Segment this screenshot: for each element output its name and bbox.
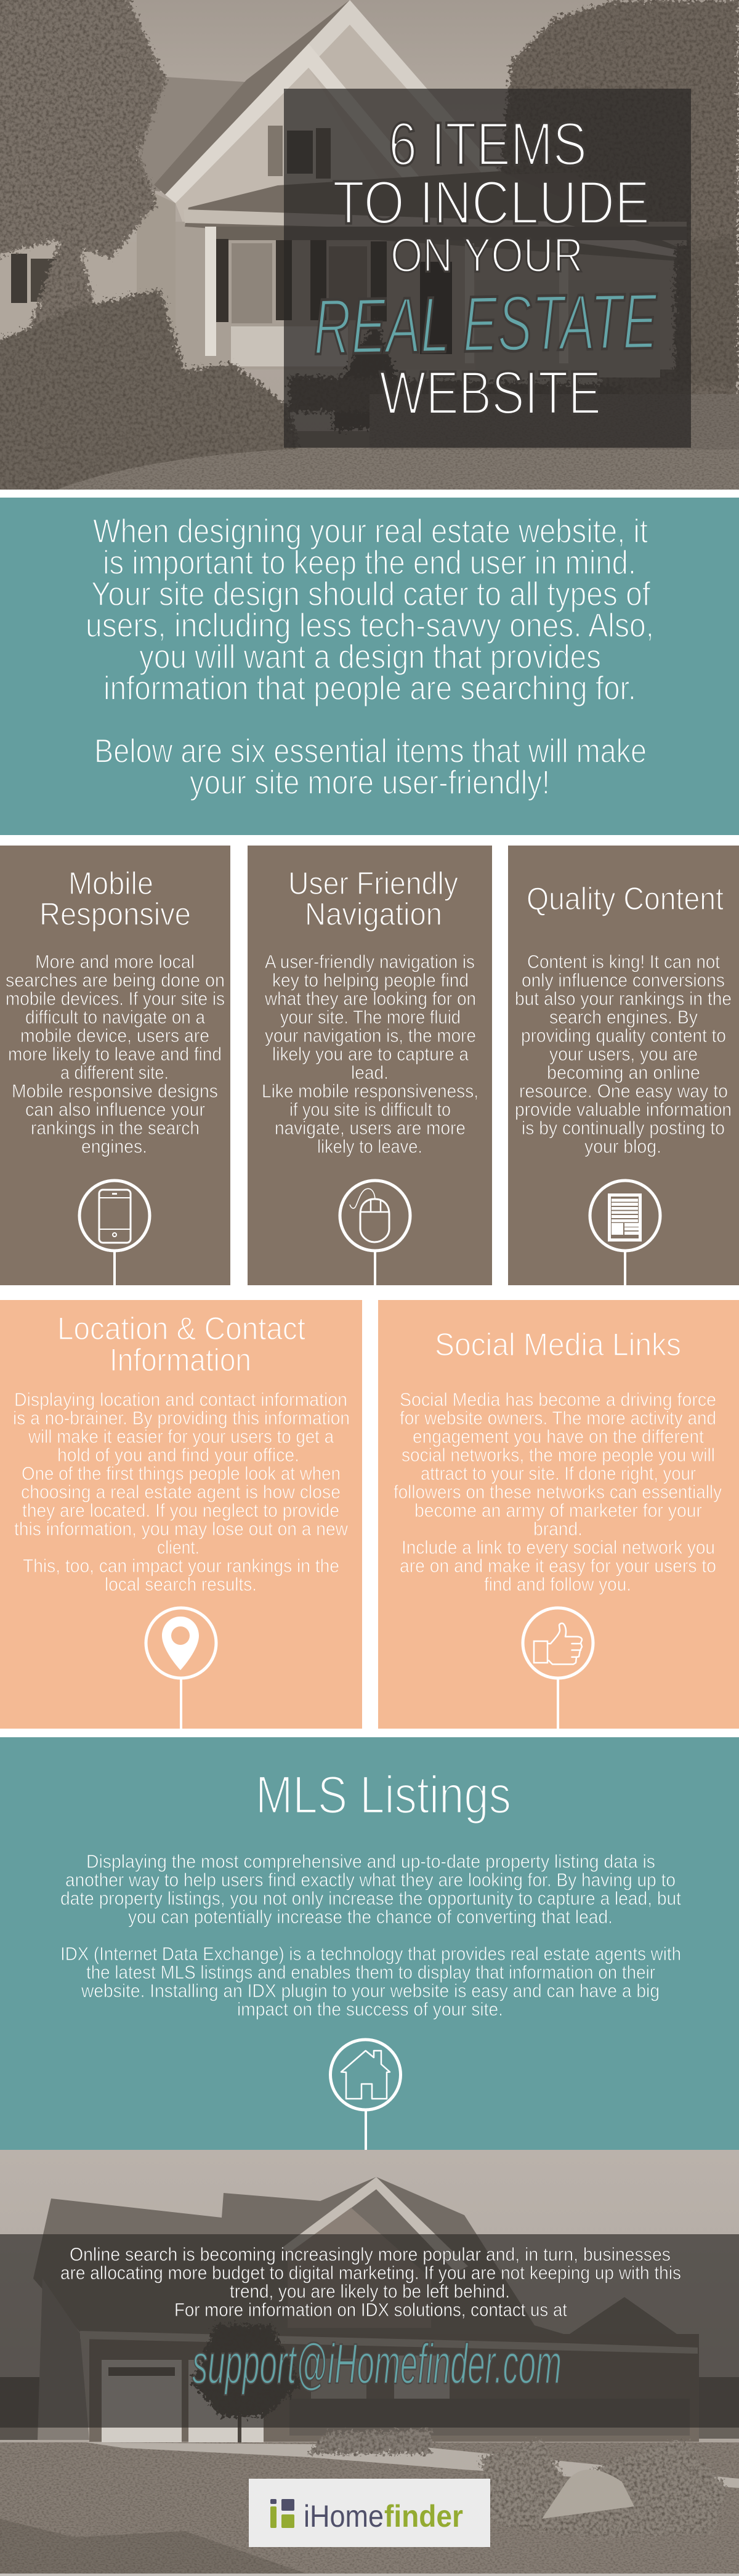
front gable: [282, 2177, 468, 2272]
body text: location and contact: choosing a real estate agent is how close: [21, 1481, 341, 1503]
panel: hero: [0, 0, 739, 499]
body text: quality content: your blog.: [584, 1136, 661, 1157]
body text: MLS listings: website. Installing an IDX plugin to your website is easy and can have a big: [81, 1980, 660, 2001]
porch shadow band: [212, 227, 687, 240]
porch roof: [185, 171, 688, 262]
intro text: information that people are searching for.: [103, 669, 636, 707]
body text: quality content: Content is king! It can not: [527, 951, 720, 972]
column: [205, 227, 216, 356]
body text: user friendly navigation: what they are looking for on: [264, 988, 476, 1009]
title: 6 ITEMS: [389, 110, 587, 178]
title: ON YOUR: [390, 228, 583, 282]
body text: user friendly navigation: A user-friendly navigation is: [265, 951, 475, 972]
intro text: users, including less tech-savvy ones. Also,: [86, 606, 654, 644]
body text: location and contact: is a no-brainer. By providing this information: [13, 1407, 350, 1429]
shrubs: [480, 2439, 727, 2537]
body text: location and contact: Displaying location and contact information: [14, 1389, 347, 1410]
body text: social media links: [394, 1389, 722, 1595]
body text: mobile responsive: more likely to leave and find: [8, 1043, 222, 1065]
left siding: [38, 2279, 89, 2440]
title: TO INCLUDE: [333, 168, 650, 236]
title: [313, 110, 658, 427]
body text: MLS listings: another way to help users find exactly what they are looking for. By having up to: [65, 1869, 676, 1891]
body text: mobile responsive: [6, 951, 225, 1157]
body text: social media links: become an army of marketer for your: [414, 1500, 702, 1521]
body text: mobile responsive: More and more local: [35, 951, 195, 972]
body text: user friendly navigation: if you site is difficult to: [289, 1099, 451, 1120]
body text: user friendly navigation: likely you are to capture a: [272, 1043, 469, 1065]
heading: mobile responsive: [39, 866, 191, 932]
intro text: Your site design should cater to all types of: [91, 575, 651, 613]
intro text: is important to keep the end user in mind.: [103, 543, 636, 581]
front door and window: [394, 2356, 450, 2429]
body text: social media links: social networks, the more people you will: [402, 1444, 715, 1466]
intro text: you will want a design that provides: [139, 637, 601, 676]
body text: location and contact: One of the first things people look at when: [22, 1463, 341, 1484]
left wing: [0, 242, 137, 334]
right tree lower: [674, 234, 739, 388]
heading: MLS listings: MLS Listings: [256, 1766, 511, 1825]
body text: user friendly navigation: lead.: [351, 1062, 389, 1083]
body text: mobile responsive: searches are being done on: [6, 969, 225, 991]
roof: [33, 2177, 676, 2334]
heading: user friendly navigation: [288, 866, 458, 932]
body text: mobile responsive: Mobile responsive designs: [12, 1080, 218, 1102]
body text: location and contact: [13, 1389, 350, 1595]
porch wall: [176, 222, 687, 369]
main gable wall: [309, 25, 406, 89]
windows: [216, 239, 228, 322]
body text: social media links: attract to your site. If done right, your: [421, 1463, 696, 1484]
logo wordmark: [304, 2499, 463, 2534]
body text: MLS listings: impact on the success of your site.: [237, 1998, 503, 2020]
icon: map pin: [146, 1608, 216, 1729]
intro text: When designing your real estate website, it: [93, 512, 648, 550]
closing text: [60, 2243, 681, 2320]
body text: quality content: [515, 951, 732, 1157]
icon: computer mouse: [340, 1181, 410, 1285]
right tree: [496, 0, 739, 394]
panel: introduction: [0, 498, 739, 835]
side wall: [137, 185, 176, 345]
front wall: [89, 2334, 699, 2442]
body text: location and contact: hold of you and find your office.: [57, 1444, 299, 1466]
body text: mobile responsive: engines.: [81, 1136, 147, 1157]
logo: iHomefinder: [249, 2479, 490, 2547]
body text: mobile responsive: mobile device, users are: [20, 1025, 209, 1046]
body text: social media links: brand.: [533, 1518, 583, 1540]
heading: user friendly navigation: User Friendly: [288, 866, 458, 902]
panel: user friendly navigation: [248, 846, 492, 1285]
panel: quality content: [508, 846, 739, 1285]
heading: mobile responsive: Mobile: [68, 866, 153, 902]
garage: [589, 369, 660, 378]
dark band: [0, 2234, 739, 2428]
intro text: [86, 512, 654, 801]
body text: user friendly navigation: Like mobile responsiveness,: [262, 1080, 479, 1102]
body text: user friendly navigation: navigate, users are more: [275, 1117, 466, 1139]
ground: [0, 2442, 739, 2574]
intro text: Below are six essential items that will make: [94, 732, 647, 770]
logo wordmark: finder: [384, 2499, 463, 2534]
body text: social media links: engagement you have on the different: [413, 1426, 704, 1447]
body text: mobile responsive: mobile devices. If your site is: [6, 988, 225, 1009]
house back roof: [137, 75, 245, 192]
body text: MLS listings: you can potentially increase the chance of converting that lead.: [128, 1906, 613, 1928]
body text: location and contact: will make it easier for your users to get a: [28, 1426, 334, 1447]
body text: user friendly navigation: [262, 951, 479, 1157]
logo wordmark: iHome: [304, 2499, 384, 2534]
evergreen: [26, 240, 96, 329]
body text: user friendly navigation: your navigation is, the more: [265, 1025, 476, 1046]
heading: user friendly navigation: Navigation: [305, 897, 442, 932]
body text: quality content: only influence conversions: [522, 969, 725, 991]
heading: social media links: Social Media Links: [435, 1327, 681, 1363]
icon: house: [330, 2040, 400, 2150]
body text: location and contact: they are located. If you neglect to provide: [22, 1500, 339, 1521]
heading: location and contact: Location & Contact: [57, 1311, 306, 1347]
body text: location and contact: client.: [157, 1536, 200, 1558]
title: WEBSITE: [379, 358, 601, 427]
icon: smartphone: [79, 1181, 150, 1285]
body text: user friendly navigation: key to helping people find: [272, 969, 469, 991]
lawn: [57, 448, 739, 490]
garage doors: [102, 2360, 182, 2442]
icon: document: [590, 1181, 660, 1285]
body text: MLS listings: Displaying the most comprehensive and up-to-date property listing data is: [86, 1851, 655, 1872]
body text: social media links: are on and make it easy for your users to: [400, 1555, 716, 1577]
panel: mobile responsive: [0, 846, 230, 1285]
body text: MLS listings: [60, 1851, 681, 2020]
body text: mobile responsive: a different site.: [60, 1062, 169, 1083]
closing text: are allocating more budget to digital marketing. If you are not keeping up with this: [60, 2262, 681, 2283]
body text: social media links: find and follow you.: [484, 1573, 631, 1595]
body text: user friendly navigation: your site. The more fluid: [280, 1006, 461, 1028]
body text: location and contact: this information, you may lose out on a new: [14, 1518, 349, 1540]
left tree: [0, 0, 166, 259]
upper window with shutters: [268, 126, 283, 176]
heading: location and contact: Information: [110, 1343, 251, 1378]
body text: location and contact: This, too, can impact your rankings in the: [23, 1555, 339, 1577]
logo mark: [270, 2499, 294, 2528]
body text: quality content: becoming an online: [547, 1062, 700, 1083]
heading: mobile responsive: Responsive: [39, 897, 191, 932]
body text: MLS listings: the latest MLS listings and enables them to display that information on their: [86, 1961, 655, 1983]
closing text: trend, you are likely to be left behind.: [230, 2280, 510, 2302]
panel: social media links: [378, 1300, 739, 1729]
body text: mobile responsive: difficult to navigate on a: [25, 1006, 206, 1028]
porch railing: [289, 2399, 690, 2436]
footer photo: house with porch: [0, 2150, 739, 2574]
hero photo: house with trees: [0, 0, 739, 499]
icon: thumbs up: [523, 1608, 593, 1729]
title backdrop: [284, 89, 691, 448]
body text: quality content: search engines. By: [549, 1006, 698, 1028]
panel: MLS listings: [0, 1737, 739, 2150]
body text: quality content: your users, you are: [549, 1043, 698, 1065]
body text: MLS listings: IDX (Internet Data Exchange) is a technology that provides real estate agents with: [60, 1943, 681, 1964]
shrubs: [0, 289, 308, 499]
body text: location and contact: local search results.: [105, 1573, 257, 1595]
body text: quality content: is by continually posting to: [522, 1117, 725, 1139]
tree: [191, 2325, 302, 2417]
body text: social media links: Include a link to every social network you: [402, 1536, 715, 1558]
body text: user friendly navigation: likely to leave.: [317, 1136, 422, 1157]
closing text: Online search is becoming increasingly more popular and, in turn, businesses: [70, 2243, 671, 2265]
body text: MLS listings: date property listings, you not only increase the opportunity to capture a lead, but: [60, 1888, 681, 1909]
panel: footer: [0, 2150, 739, 2576]
intro text: your site more user-friendly!: [190, 763, 550, 801]
body text: mobile responsive: can also influence your: [25, 1099, 205, 1120]
far trees: [0, 2377, 39, 2440]
panel: location and contact information: [0, 1300, 362, 1729]
lower gable: [165, 44, 431, 203]
heading: location and contact: [57, 1311, 306, 1378]
body text: social media links: Social Media has become a driving force: [400, 1389, 716, 1410]
porch furniture: [231, 326, 348, 366]
closing text: For more information on IDX solutions, contact us at: [174, 2299, 567, 2320]
body text: mobile responsive: rankings in the search: [31, 1117, 200, 1139]
